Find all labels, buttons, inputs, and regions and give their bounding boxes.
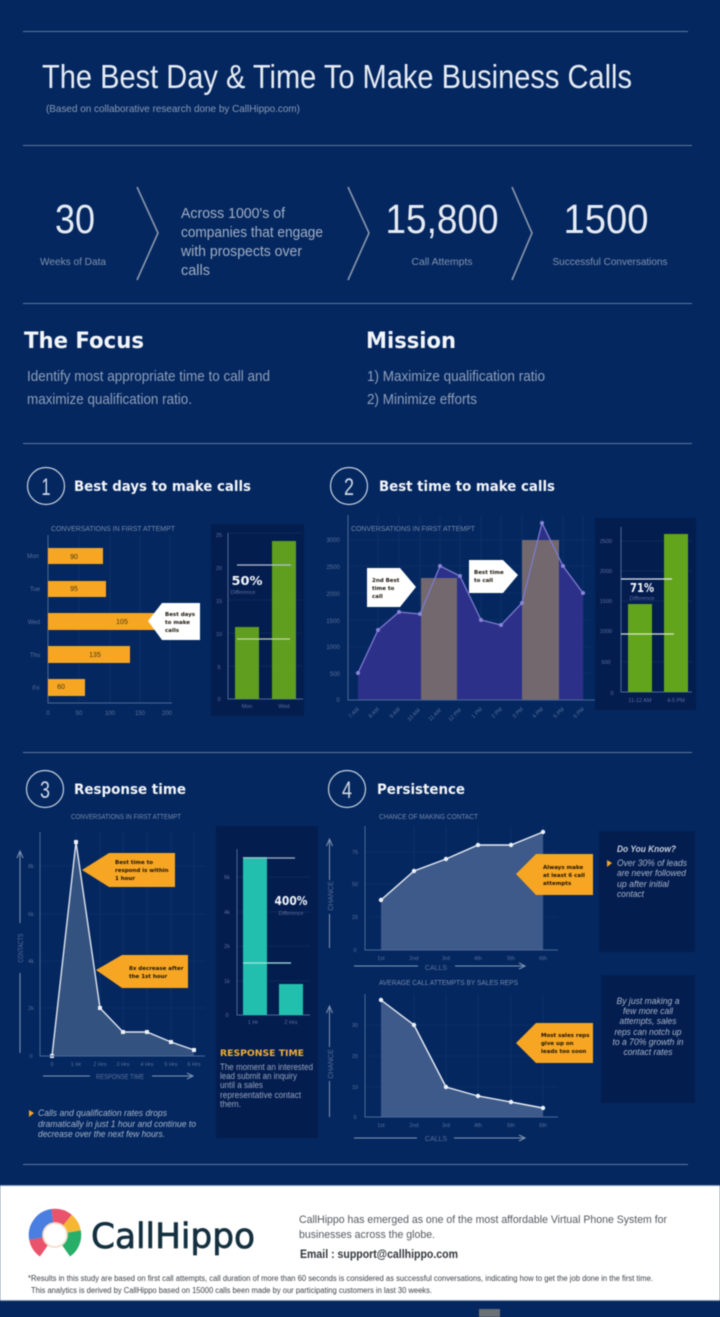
callout: most sales reps: Most sales reps	[541, 1033, 590, 1039]
heading: section 3: Response time	[74, 782, 186, 798]
callout: best time	[469, 560, 518, 593]
area chart: chance of making contact: 5th	[507, 956, 515, 962]
stat: call attempts	[386, 196, 498, 268]
area chart: best time: 1500	[326, 619, 340, 625]
area chart: average call attempts: 5th	[507, 1123, 515, 1129]
text: footnote: This analytics is derived by CallHippo based on 15000 calls been made by our participating customers in last 30 weeks.	[31, 1286, 432, 1295]
stat: companies: Across 1000's of	[181, 206, 286, 222]
callout: 2nd best time	[367, 568, 416, 607]
callout: most sales reps	[516, 1023, 593, 1063]
area chart: response time: 2k	[28, 1006, 34, 1012]
area chart: best time: 1 PM	[471, 706, 484, 720]
callout: 2nd best time: call	[372, 594, 383, 600]
bar chart: best days: Fri	[32, 686, 40, 692]
bar chart: best days: 200	[162, 711, 173, 717]
area chart: response time: 0	[50, 1062, 54, 1068]
stat: conversations: 1500	[564, 196, 648, 242]
area chart: best time: 1000	[326, 645, 340, 651]
bar chart: best days: 95	[70, 586, 78, 593]
callout: best time to respond	[82, 853, 175, 887]
heading: section 3: 3	[40, 777, 50, 804]
panel: 400% difference: 0	[225, 1013, 229, 1019]
panel: 71% difference: 0	[610, 691, 614, 697]
area chart: best time	[326, 515, 596, 723]
area chart: chance of making contact: 50	[352, 882, 358, 888]
callout: always make 6 attempts: at least 6 call	[543, 873, 585, 879]
callout: always make 6 attempts: Always make	[543, 865, 583, 871]
heading: mission: Mission	[366, 329, 456, 354]
area chart: chance of making contact: 6th	[539, 956, 547, 962]
panel: growth note	[601, 975, 695, 1103]
panel: do you know: Do You Know?	[617, 844, 676, 855]
panel: 71% difference: 2500	[600, 539, 612, 545]
text: about	[299, 1214, 667, 1241]
panel: 71% difference: 1500	[600, 599, 612, 605]
panel: 50% difference: 50%	[232, 573, 263, 588]
axis label: contacts: CONTACTS	[18, 933, 25, 962]
area chart: best time: 12 PM	[448, 707, 463, 723]
panel: growth note: few more call	[623, 1006, 674, 1017]
panel: 50% difference: 5	[217, 665, 221, 671]
arrow: chevron 2	[348, 187, 369, 280]
callout: 2nd best time: time to	[372, 586, 395, 592]
stat: conversations	[552, 196, 668, 268]
callout: best days: to make	[165, 620, 190, 626]
area chart: response time: 4k	[28, 959, 34, 965]
panel: 400% difference	[216, 826, 318, 1138]
heading: section 1: Best days to make calls	[74, 479, 251, 495]
area chart: best time: 6 PM	[573, 706, 586, 720]
text: response time definition	[220, 1062, 313, 1109]
heading: section 2	[330, 468, 555, 504]
panel: do you know: contact	[617, 889, 644, 900]
axis label: contacts	[17, 851, 25, 1053]
stat: call attempts: 15,800	[386, 196, 498, 242]
text: footnote: *Results in this study are based on first call attempts, call duration of more than 60 seconds is considered as successful conversations, indicating how to get the job done in the first time.	[28, 1274, 653, 1283]
area chart: average call attempts: AVERAGE CALL ATTEMPTS BY SALES REPS	[379, 980, 518, 987]
callout: best time to respond: Best time to	[115, 860, 153, 866]
callout: best time to respond: respond is within	[115, 868, 169, 874]
panel: 50% difference: Mon	[242, 704, 252, 710]
panel: 50% difference: 20	[216, 566, 222, 572]
footer marker	[479, 1309, 500, 1317]
bar chart: best days: 50	[76, 711, 83, 717]
area chart: best time: 500	[330, 672, 341, 678]
area chart: chance of making contact	[326, 814, 593, 972]
panel: do you know: up after initial	[617, 879, 670, 890]
area chart: chance of making contact: 3rd	[442, 956, 450, 962]
text: response caption: Calls and qualification rates drops	[38, 1108, 167, 1119]
heading: response time definition: RESPONSE TIME	[220, 1049, 304, 1059]
footer panel	[0, 1186, 720, 1300]
callout: 2nd best time: 2nd Best	[372, 578, 400, 584]
stat: call attempts: Call Attempts	[412, 256, 472, 268]
text: response time definition: representative contact	[220, 1090, 301, 1100]
text: response caption	[29, 1108, 196, 1140]
area chart: chance of making contact: 75	[352, 850, 358, 856]
area chart: best time: 9 AM	[389, 706, 402, 720]
bar chart: best days: 0	[46, 711, 50, 717]
axis label: calls	[354, 963, 525, 972]
stat: weeks of data: 30	[55, 196, 95, 242]
subtitle: (Based on collaborative research done by CallHippo.com)	[46, 103, 300, 115]
text: mission body: 1) Maximize qualification ratio	[367, 369, 545, 385]
panel: growth note: attempts, sales	[620, 1016, 677, 1027]
text: mission body	[367, 369, 545, 408]
text: focus body: maximize qualification ratio.	[27, 392, 192, 408]
area chart: best time: 0	[336, 698, 340, 704]
axis label: calls 2: CALLS	[425, 1136, 447, 1143]
bar chart: best days: Tue	[30, 587, 41, 593]
bar chart: best days: 90	[70, 554, 78, 561]
area chart: average call attempts: 3rd	[442, 1123, 450, 1129]
panel: 71% difference: 11-12 AM	[628, 698, 652, 704]
panel: growth note: reps can notch up	[614, 1027, 682, 1038]
area chart: response time: 6k	[28, 912, 34, 918]
text: focus body: Identify most appropriate time to call and	[27, 369, 270, 385]
area chart: chance of making contact: CHANCE OF MAKING CONTACT	[379, 814, 479, 821]
heading: section 2: Best time to make calls	[379, 479, 555, 495]
bar chart: best days: Mon	[27, 554, 39, 560]
logo wordmark: CallHippo	[91, 1217, 255, 1257]
area chart: best time: 2000	[326, 592, 340, 598]
panel: 400% difference: 1k	[224, 979, 230, 985]
panel: 50% difference: Wed	[278, 704, 290, 710]
area chart: chance of making contact: 1st	[377, 956, 385, 962]
area chart: chance of making contact: 2nd	[409, 956, 419, 962]
callout: best time: to call	[474, 578, 493, 584]
area chart: chance of making contact: 4th	[474, 956, 482, 962]
area chart: response time: 5 Hrs	[164, 1062, 178, 1068]
panel: 400% difference: Difference	[279, 911, 303, 917]
area chart: average call attempts: 2nd	[409, 1123, 419, 1129]
callout: 8x decrease: the 1st hour	[129, 974, 167, 980]
area chart: average call attempts: 1st	[377, 1123, 385, 1129]
axis label: calls: CALLS	[425, 965, 447, 972]
heading: section 4	[328, 770, 465, 808]
callout: best days	[148, 603, 200, 640]
area chart: average call attempts: 6th	[539, 1123, 547, 1129]
stat: weeks of data: Weeks of Data	[40, 256, 106, 268]
text: response time definition: them.	[220, 1099, 241, 1109]
area chart: response time: 1 Hr	[71, 1062, 81, 1068]
heading: section 1: 1	[42, 474, 50, 501]
panel: 400% difference: 4k	[224, 910, 230, 916]
stat: companies: companies that engage	[181, 225, 323, 241]
heading: section 4: 4	[342, 777, 352, 804]
arrow: chevron 3	[512, 187, 532, 280]
area chart: response time: 6 Hrs	[187, 1062, 201, 1068]
area chart: response time: 0	[29, 1054, 33, 1060]
axis label: chance 2	[326, 1006, 335, 1117]
panel: 400% difference: 6k	[224, 875, 230, 881]
area chart: response time: 8k	[28, 864, 34, 870]
heading: section 2: 2	[344, 474, 354, 501]
area chart: best time: 3000	[326, 538, 340, 544]
panel: 50% difference: Difference	[231, 590, 255, 596]
panel: growth note: to a 70% growth in	[612, 1037, 684, 1048]
panel: 50% difference	[211, 524, 304, 716]
stat: companies: calls	[181, 263, 210, 279]
panel: growth note: contact rates	[624, 1047, 673, 1058]
stat: companies: with prospects over	[180, 244, 302, 260]
area chart: average call attempts: 30	[352, 1023, 358, 1029]
axis label: chance	[326, 839, 335, 948]
callout: best time to respond: 1 hour	[115, 876, 135, 882]
bar chart: best days: 105	[116, 619, 128, 626]
panel: 50% difference: 10	[216, 632, 222, 638]
panel: 71% difference: Difference	[630, 596, 654, 602]
heading: section 3	[26, 770, 186, 808]
panel: 400% difference: 2 Hrs	[284, 1020, 298, 1026]
panel: do you know	[599, 831, 695, 952]
text: footnote	[28, 1274, 653, 1295]
panel: 71% difference: 1000	[600, 629, 612, 635]
stat: conversations: Successful Conversations	[552, 256, 668, 268]
area chart: best time: 3 PM	[512, 706, 525, 720]
area chart: chance of making contact: 0	[353, 948, 357, 954]
area chart: average call attempts: 20	[352, 1054, 358, 1060]
panel: 71% difference: 2000	[600, 569, 612, 575]
heading: section 1	[28, 468, 251, 504]
text: email: Email : support@callhippo.com	[300, 1249, 458, 1261]
panel: do you know: Over 30% of leads	[617, 858, 687, 869]
panel: 71% difference: 500	[601, 660, 611, 666]
area chart: best time: 2500	[326, 565, 340, 571]
callout: always make 6 attempts: attempts	[543, 881, 572, 887]
axis label: chance 2: CHANCE	[328, 1049, 335, 1079]
panel: 50% difference: 15	[216, 599, 222, 605]
callout: best days: Best days	[165, 612, 196, 618]
panel: 400% difference: 400%	[274, 894, 308, 908]
text: mission body: 2) Minimize efforts	[367, 392, 477, 408]
area chart: response time: 3 Hrs	[116, 1062, 130, 1068]
area chart: response time	[17, 814, 205, 1081]
callout: 8x decrease: 8x decrease after	[129, 966, 184, 972]
text: response caption: decrease over the next few hours.	[38, 1129, 165, 1140]
callout: most sales reps: leads too soon	[541, 1049, 586, 1055]
callout: always make 6 attempts	[516, 854, 593, 895]
text: response time definition: The moment an interested	[220, 1062, 313, 1072]
bar chart: best days: 60	[57, 684, 65, 691]
text: response caption: dramatically in just 1 hour and continue to	[38, 1119, 196, 1130]
area chart: best time: 5 PM	[553, 706, 566, 720]
bar chart: best days: 150	[135, 711, 146, 717]
area chart: response time: 2 Hrs	[93, 1062, 107, 1068]
panel: 50% difference: 25	[216, 533, 222, 539]
area chart: average call attempts	[326, 980, 593, 1143]
area chart: average call attempts: 0	[353, 1115, 357, 1121]
area chart: best time: 7 AM	[348, 706, 361, 720]
callout: 8x decrease	[96, 955, 188, 988]
icon: callhippo logo	[36, 1216, 75, 1251]
area chart: average call attempts: 10	[352, 1085, 358, 1091]
axis label: response time: RESPONSE TIME	[96, 1074, 144, 1081]
area chart: best time: 10 AM	[407, 707, 422, 723]
heading: the focus: The Focus	[24, 329, 144, 354]
area chart: best time: CONVERSATIONS IN FIRST ATTEMPT	[351, 526, 476, 533]
panel: growth note: By just making a	[616, 996, 680, 1007]
bar chart: best days: Wed	[28, 620, 40, 626]
area chart: response time: CONVERSATIONS IN FIRST ATTEMPT	[71, 814, 182, 821]
stat: companies	[180, 206, 323, 279]
panel: 400% difference: 2k	[224, 944, 230, 950]
bar chart: best days: CONVERSATIONS IN FIRST ATTEMPT	[51, 526, 176, 533]
callout: most sales reps: give up on	[541, 1041, 574, 1047]
area chart: best time: 8 AM	[368, 706, 381, 720]
callout: best time: Best time	[474, 570, 504, 576]
panel: 400% difference: 1 Hr	[248, 1020, 258, 1026]
area chart: response time: 4 Hrs	[140, 1062, 154, 1068]
panel: 50% difference: 0	[217, 697, 221, 703]
heading: section 4: Persistence	[377, 782, 465, 798]
title: The Best Day & Time To Make Business Calls	[42, 58, 632, 95]
bar chart: best days	[27, 526, 200, 717]
axis label: calls 2	[354, 1135, 525, 1143]
axis label: response time	[43, 1073, 193, 1081]
text: response time definition: until a sales	[220, 1080, 263, 1090]
bar chart: best days: 135	[89, 652, 101, 659]
area chart: average call attempts: 4th	[474, 1123, 482, 1129]
panel: 71% difference: 4-5 PM	[667, 698, 685, 704]
callout: best days: calls	[165, 628, 180, 634]
axis label: chance: CHANCE	[328, 881, 335, 911]
text: about: CallHippo has emerged as one of the most affordable Virtual Phone System for	[299, 1214, 667, 1226]
bar chart: best days: 100	[105, 711, 116, 717]
text: about: businesses across the globe.	[299, 1229, 435, 1241]
panel: do you know: are never followed	[617, 868, 687, 879]
area chart: best time: 2 PM	[491, 706, 504, 720]
stat: weeks of data	[40, 196, 106, 268]
area chart: best time: 4 PM	[532, 706, 545, 720]
panel: 71% difference: 71%	[630, 581, 654, 595]
bar chart: best days: Thu	[30, 653, 40, 659]
text: response time definition: lead submit an inquiry	[220, 1071, 297, 1081]
arrow: chevron 1	[137, 187, 158, 280]
panel: 71% difference	[595, 518, 696, 710]
area chart: chance of making contact: 25	[352, 915, 358, 921]
text: focus body	[27, 369, 270, 408]
area chart: best time: 11 AM	[428, 708, 443, 723]
